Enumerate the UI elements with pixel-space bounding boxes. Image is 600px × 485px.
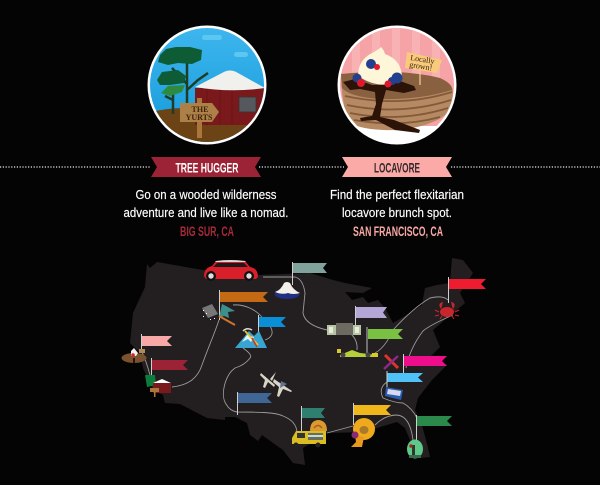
icon: yurt in the woods badge [148, 26, 270, 146]
ribbon: locavore [342, 157, 452, 177]
icon: fighter planes [260, 372, 292, 397]
flag: dark teal [302, 406, 325, 432]
flag: light blue [387, 371, 423, 387]
icon: yurt in the woods badge: YURTS [186, 113, 213, 122]
icon: race car [337, 349, 378, 358]
icon: pancake brunch badge [338, 26, 458, 150]
icon: mountain with ice axe [235, 329, 267, 348]
flag: pale teal [292, 262, 327, 285]
flag: orange [220, 290, 268, 320]
icon: mini pancake table [122, 348, 146, 363]
flag: blue [258, 315, 286, 340]
flag: yellow [354, 403, 391, 425]
icon: stack of money [327, 323, 361, 335]
icon: red crab [435, 302, 459, 319]
icon: pancake brunch badge: Locally [410, 53, 435, 66]
text: tree hugger description: Go on a wooded wilderness [136, 188, 276, 202]
flag: magenta [404, 354, 447, 373]
ribbon: tree hugger [151, 157, 261, 177]
flag: slate blue [238, 392, 272, 415]
flag: dark green [416, 415, 452, 440]
flag: lavender [356, 306, 387, 325]
text: san francisco location: SAN FRANCISCO, CA [353, 224, 443, 239]
icon: taco truck [292, 431, 326, 448]
icon: yurt in the woods badge: THE [192, 105, 208, 114]
ribbon: locavore: LOCAVORE [374, 160, 420, 176]
icon: green skull and bottle [407, 440, 423, 458]
routes: dashed trail across the map [141, 277, 453, 440]
text: locavore description: Find the perfect flexitarian [330, 188, 464, 202]
map: united states [130, 258, 473, 465]
flag: green [367, 327, 403, 353]
icon: crossed hot dogs [384, 355, 398, 369]
ribbon: tree hugger: TREE HUGGER [176, 160, 238, 176]
icon: pancake brunch badge: grown! [409, 60, 433, 73]
flag: dark red [152, 358, 188, 376]
text: locavore description [330, 188, 464, 220]
text: tree hugger description: adventure and live like a nomad. [124, 206, 288, 220]
icon: taco [310, 420, 327, 431]
icon: mini yurt and tree [145, 375, 171, 397]
icon: blue bus train [385, 387, 403, 400]
text: locavore description: locavore brunch spot. [342, 206, 452, 220]
icon: red mini car [204, 260, 258, 281]
flag: pink [142, 334, 172, 350]
text: big sur location: BIG SUR, CA [180, 224, 234, 239]
icon: snowboarder [202, 304, 235, 325]
flag: red [448, 277, 486, 303]
icon: snowy volcano [274, 282, 300, 299]
text: tree hugger description [124, 188, 288, 220]
icon: tuba player [351, 418, 375, 447]
